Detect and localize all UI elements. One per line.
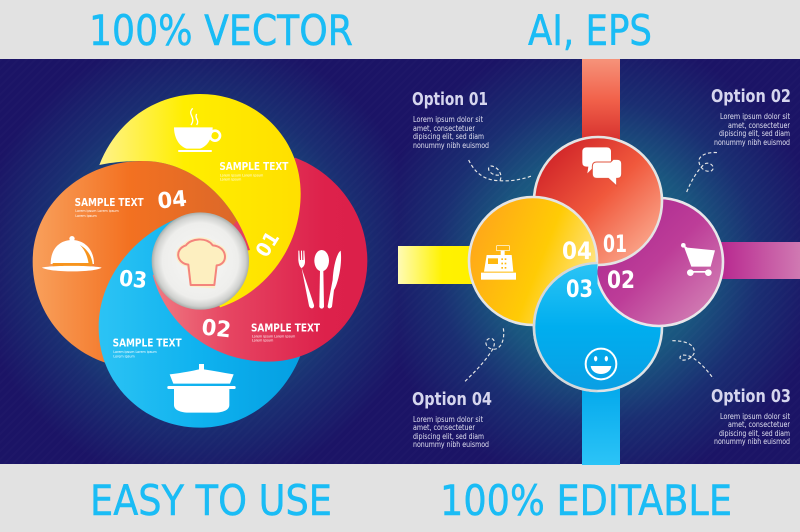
circle: blue 03 [534,263,662,391]
dashed arrow: option 02 [687,152,718,192]
label: sample text red: Lorem ipsum Lorem ipsum [252,334,295,338]
centre disc [152,212,249,310]
icon: cash register [481,246,516,280]
text block: option 04: Option 04 [412,389,492,410]
text block: option 01 [412,89,489,150]
text block: option 04: dipiscing elit, sed diam [413,432,484,441]
dashed arrow: option 03 [672,341,713,379]
icon: fork spoon knife [298,250,341,309]
text block: option 01: Lorem ipsum dolor sit [413,115,483,124]
petal: orange [33,161,250,363]
label: sample text yellow [219,161,288,182]
label: sample text yellow: Lorem ipsum Lorem ipsum [220,173,263,177]
petal: red [153,158,367,362]
number 01: 01 [250,227,284,261]
icon: shopping cart [681,243,715,276]
circle: yellow 04 [469,197,597,325]
heading: easy to use: EASY TO USE [90,476,332,525]
label: sample text yellow: SAMPLE TEXT [219,161,288,173]
text block: option 03 [711,386,791,446]
label: sample text red [251,322,320,343]
icon: chat bubbles [582,147,622,186]
icon: smiley [586,349,616,379]
dashed arrow: option 01 [469,160,532,181]
number 02: 02 [607,266,635,294]
dashed arrow: option 04 [465,328,504,382]
panel: options infographic [398,59,800,465]
text block: option 01: Option 01 [412,89,488,110]
icon: serving cloche [42,236,102,271]
label: sample text orange: Lorem ipsum [75,214,97,218]
label: sample text orange: Lorem ipsum Lorem ipsum [75,209,119,213]
icon: coffee cup [174,108,220,152]
circle: purple 02 [595,198,723,326]
label: sample text yellow: Lorem ipsum [220,178,241,182]
circle: red 01 [534,137,662,265]
heading: 100% editable: 100% EDITABLE [440,476,732,525]
label: sample text blue: Lorem ipsum Lorem ipsum [113,350,157,354]
label: sample text red: SAMPLE TEXT [251,322,320,334]
band: purple right [720,242,800,279]
top banner [0,0,800,59]
label: sample text orange [75,197,144,218]
text block: option 01: dipiscing elit, sed diam [413,132,484,141]
text block: option 04: nonummy nibh euismod [413,440,489,449]
text block: option 04 [412,389,492,449]
text block: option 02 [711,86,791,147]
label: sample text blue: SAMPLE TEXT [113,338,182,350]
text block: option 01: nonummy nibh euismod [413,141,489,150]
icon: cooking pot [167,364,236,413]
icon: chef hat [176,237,227,288]
panel: food infographic [0,59,398,464]
bottom banner [0,465,800,532]
number 03: 03 [118,266,148,294]
petal: blue [99,214,301,428]
number 02: 02 [200,315,232,343]
label: sample text blue [113,338,182,358]
label: sample text red: Lorem ipsum [252,339,273,343]
heading: AI, EPS: AI, EPS [528,6,652,55]
band: yellow left [398,246,472,284]
petal: yellow [99,94,301,307]
heading: 100% vector: 100% VECTOR [89,6,353,55]
text block: option 01: amet, consectetuer [413,124,476,133]
label: sample text orange: SAMPLE TEXT [75,197,144,209]
number 01: 01 [603,230,627,258]
number 04: 04 [156,187,188,215]
circle: blue overlap [532,262,598,392]
band: red top [582,59,620,141]
number 03: 03 [566,275,593,303]
number 04: 04 [562,237,592,265]
text block: option 04: Lorem ipsum dolor sit [413,415,483,424]
text block: option 04: amet, consectetuer [413,423,476,432]
label: sample text blue: Lorem ipsum [113,354,135,358]
band: blue bottom [582,388,620,465]
